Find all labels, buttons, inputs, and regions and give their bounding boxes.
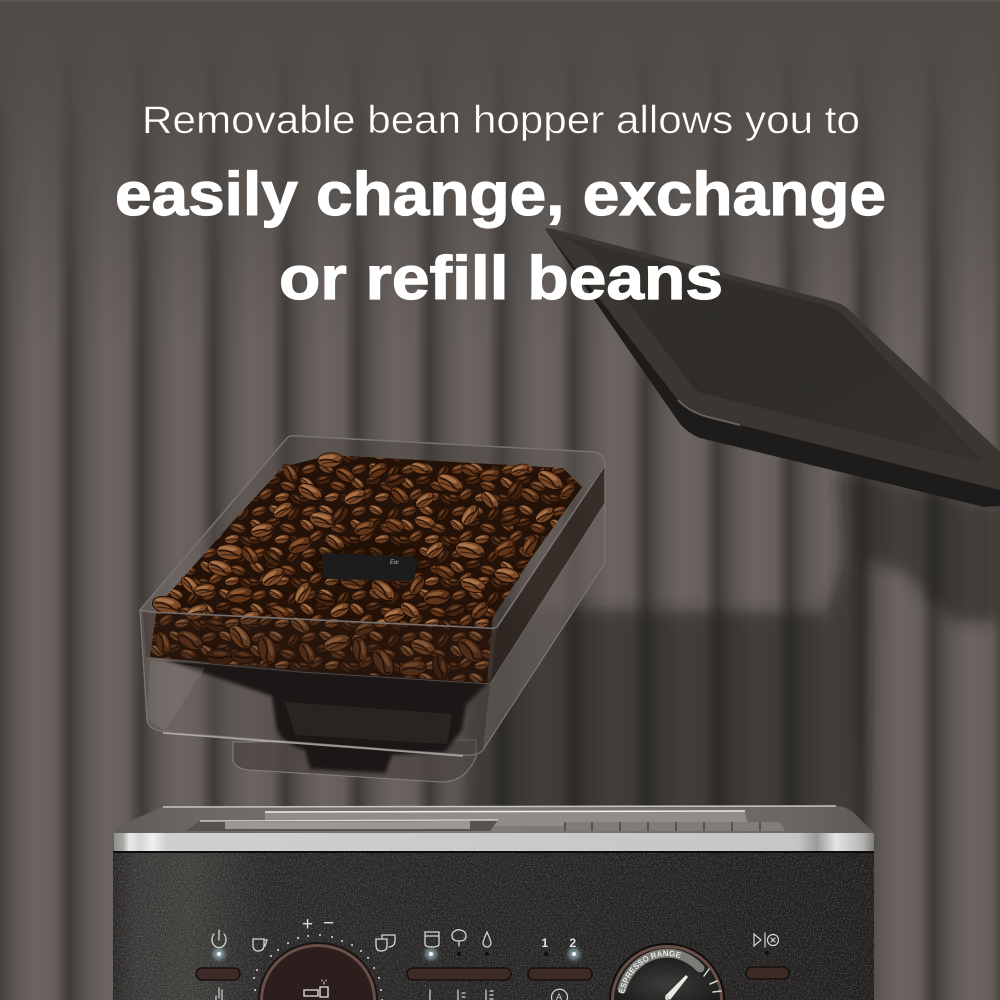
rim outline <box>140 436 605 628</box>
beans in tray <box>150 455 582 683</box>
bold line two: or refill beans <box>279 244 723 312</box>
floating lid <box>545 228 1000 507</box>
button pills <box>196 967 789 980</box>
intro line: Removable bean hopper allows you to <box>142 99 860 142</box>
espresso range gauge: ESPRESSO RANGE <box>618 950 682 994</box>
textured body <box>113 851 874 1000</box>
machine top tray <box>114 806 874 833</box>
hopper base stub <box>233 740 476 782</box>
strength numbers <box>542 936 576 950</box>
dial scale dots <box>254 935 382 1000</box>
glass tint over beans front <box>143 612 497 684</box>
dial plus and minus: − <box>323 913 334 934</box>
lid rim <box>545 228 1000 490</box>
dial plus and minus: + <box>302 914 313 935</box>
espresso range gauge <box>609 943 725 1000</box>
led row <box>213 948 769 960</box>
glass body <box>140 436 605 755</box>
brew cup icon <box>425 932 439 947</box>
control panel <box>195 913 790 1000</box>
coffee machine <box>113 805 874 1000</box>
selector dial <box>258 942 378 1000</box>
power icon <box>212 930 226 948</box>
strength numbers: 1 <box>542 936 548 950</box>
bold line one: easily change, exchange <box>115 160 886 228</box>
lid underside edge <box>545 228 1000 507</box>
chrome band <box>114 833 874 851</box>
glass left wall reflection <box>147 660 205 730</box>
double cup icon <box>376 935 395 951</box>
drop icon <box>483 932 491 947</box>
bean hopper <box>140 436 605 782</box>
lid panel <box>563 236 982 462</box>
strength numbers: 2 <box>570 936 576 950</box>
tree icon <box>452 930 466 946</box>
glass right wall <box>490 463 605 684</box>
single cup icon <box>253 939 267 951</box>
black hopper tab <box>313 543 423 583</box>
funnel and spout <box>165 660 490 773</box>
lower icons <box>216 988 568 1000</box>
dial plus and minus <box>302 913 334 935</box>
black hopper tab: Ew <box>390 560 399 566</box>
heading <box>115 99 886 312</box>
brew start and stop icon <box>754 933 778 947</box>
individual beans <box>151 452 578 681</box>
